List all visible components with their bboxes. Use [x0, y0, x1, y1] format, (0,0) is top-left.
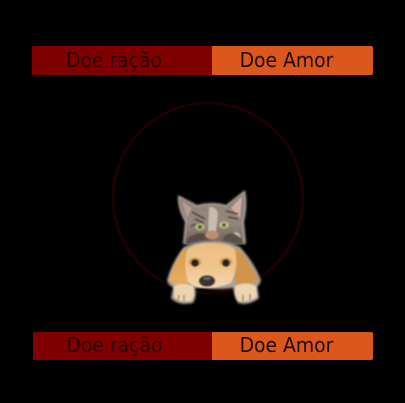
progress ring — [113, 103, 303, 293]
button: Doe ração (bottom): Doe ração — [66, 333, 162, 357]
icon: dog — [167, 241, 261, 304]
button: Doe ração (top) — [32, 46, 212, 75]
cat halo — [178, 190, 246, 244]
dog paws — [174, 284, 194, 302]
top button group — [32, 46, 373, 75]
icon: cat — [178, 190, 246, 244]
icon: cat and dog — [167, 190, 261, 304]
button: Doe ração (top): Doe ração — [66, 48, 162, 72]
dog face — [185, 243, 236, 288]
button: Doe ração (bottom) — [33, 332, 212, 360]
dog halo: paws — [171, 282, 196, 304]
dog halo: head and ears — [167, 241, 261, 289]
button: Doe Amor (top): Doe Amor — [240, 48, 333, 72]
bottom button group — [33, 332, 373, 360]
dog ears — [169, 248, 192, 285]
button: Doe Amor (bottom): Doe Amor — [240, 333, 333, 357]
button: Doe Amor (bottom) — [212, 332, 373, 360]
button: Doe Amor (top) — [212, 46, 373, 75]
